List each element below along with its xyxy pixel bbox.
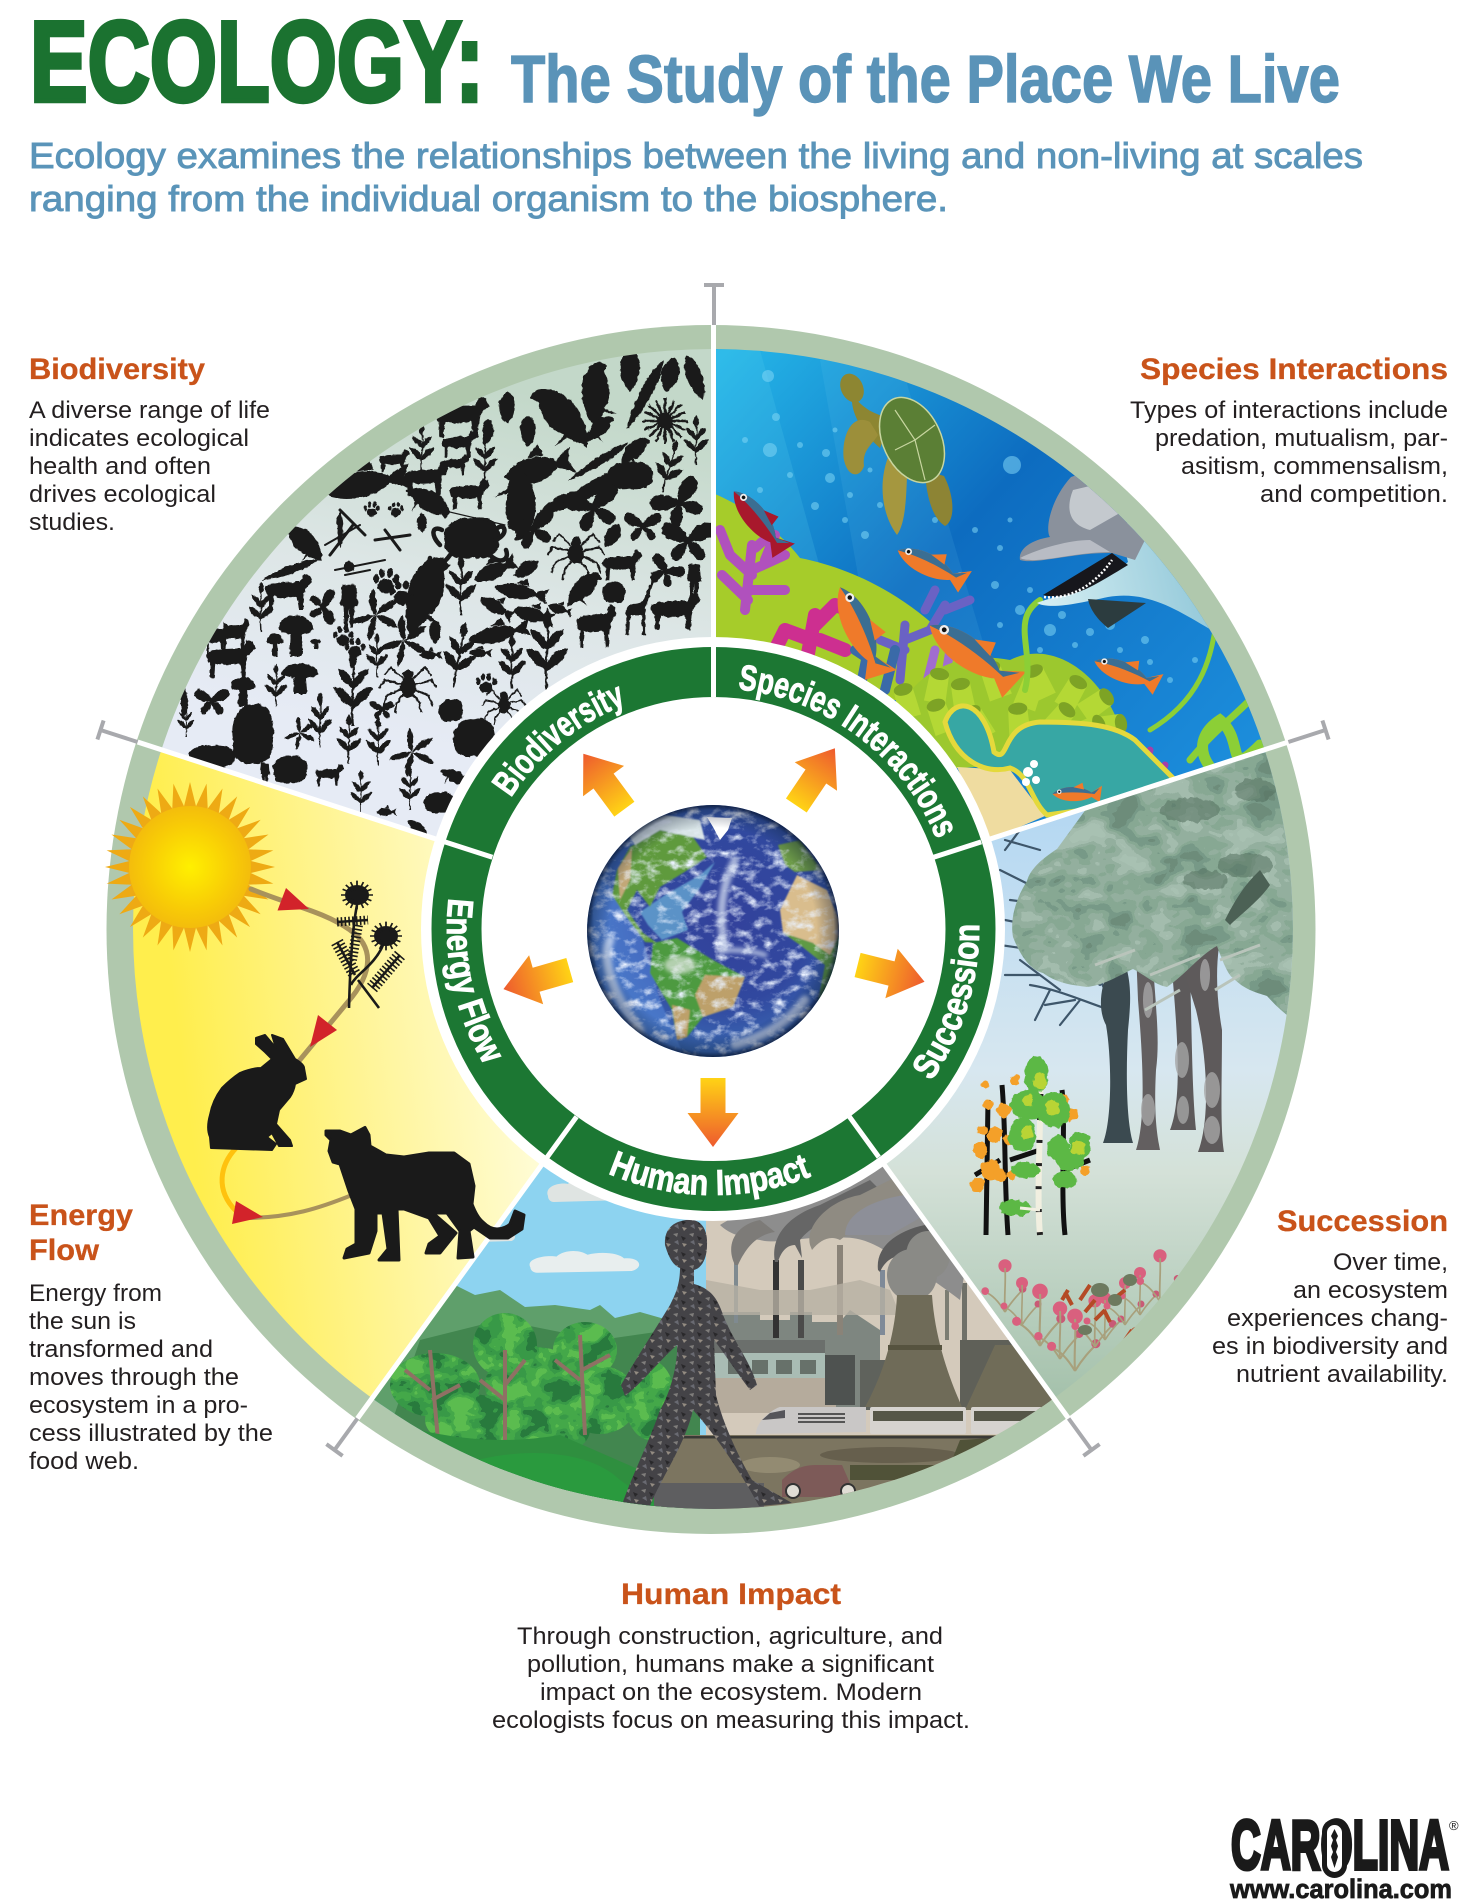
text block: energy flow [29, 1199, 273, 1475]
text block: succession: an ecosystem [1293, 1277, 1448, 1304]
kelp [1025, 600, 1260, 790]
text block: energy flow: Flow [29, 1234, 100, 1267]
text block: human impact: Human Impact [621, 1578, 841, 1611]
text block: species interactions: predation, mutualism, par- [1155, 425, 1448, 452]
text block: energy flow: Energy from [29, 1280, 162, 1307]
text block: biodiversity: A diverse range of life [29, 397, 270, 424]
text block: biodiversity: drives ecological [29, 481, 216, 508]
text block: species interactions: Types of interactions include [1130, 397, 1448, 424]
outer ring [106, 325, 1316, 1534]
text block: biodiversity: indicates ecological [29, 425, 249, 452]
text block: biodiversity [29, 353, 270, 536]
text block: species interactions [1130, 353, 1448, 508]
smoke [720, 1160, 970, 1301]
ecology wheel [96, 283, 1330, 1534]
text block: energy flow: cess illustrated by the [29, 1420, 273, 1447]
text block: biodiversity: studies. [29, 509, 115, 536]
octopus and insects detail [325, 505, 507, 575]
sector dividers [138, 325, 1288, 1418]
train [756, 1407, 1064, 1434]
heading: ECOLOGY: ECOLOGY: [30, 0, 484, 126]
intro text block: Ecology examines the relationships between the living and non-living at scales [29, 135, 1363, 176]
text block: species interactions: and competition. [1260, 481, 1448, 508]
text block: human impact: ecologists focus on measuring this impact. [492, 1707, 970, 1734]
text block: human impact: impact on the ecosystem. Modern [540, 1679, 922, 1706]
panel: energy flow food web [103, 780, 524, 1260]
green hill [716, 494, 955, 700]
text block: succession: es in biodiversity and [1212, 1333, 1448, 1360]
ring label: Human Impact: Human Impact [609, 1150, 812, 1200]
subtitle: The Study of the Place We Live [511, 42, 1340, 117]
cooling towers [865, 1295, 962, 1407]
hills and forest [374, 1286, 662, 1506]
text block: succession: nutrient availability. [1236, 1361, 1448, 1388]
title [30, 0, 1340, 126]
icon: earth globe [587, 805, 839, 1070]
rabbit [208, 1035, 306, 1150]
arrow to human impact [688, 1078, 738, 1147]
industrial buildings [706, 1245, 1050, 1413]
sponge tubes [894, 661, 1128, 736]
ground [661, 1435, 996, 1509]
text block: species interactions: asitism, commensalism, [1181, 453, 1448, 480]
thistle [337, 881, 402, 1008]
food web links [222, 889, 368, 1218]
text block: energy flow: transformed and [29, 1336, 213, 1363]
panel: energy flow background [133, 752, 540, 1397]
sand [957, 767, 1045, 840]
walking person [621, 1220, 792, 1506]
panel: human impact image [360, 1160, 1075, 1515]
green label ring [456, 672, 970, 1186]
ring label: Species Interactions: Species Interactions [739, 664, 953, 838]
red arrowheads [232, 888, 337, 1224]
text block: succession [1212, 1205, 1448, 1388]
text block: succession: Succession [1277, 1205, 1448, 1238]
logo: Carolina: ® [1449, 1818, 1459, 1833]
sea turtle [836, 370, 957, 535]
text block: species interactions: Species Interactions [1140, 353, 1448, 386]
canopy [1012, 752, 1293, 1014]
panel: biodiversity silhouettes [150, 340, 720, 850]
reef base [913, 654, 1115, 768]
text block: succession: experiences chang- [1227, 1305, 1448, 1332]
fish [734, 491, 795, 558]
wildflowers [981, 1249, 1181, 1371]
text block: biodiversity: health and often [29, 453, 211, 480]
text block: succession: Over time, [1333, 1249, 1448, 1276]
arrow to species interactions [775, 734, 856, 820]
bare branches [999, 832, 1104, 1026]
clouds [547, 1183, 606, 1202]
text block: energy flow: Energy [29, 1199, 133, 1232]
text block: energy flow: food web. [29, 1448, 139, 1475]
panel: species interactions reef image [716, 349, 1264, 836]
text block: human impact [492, 1578, 970, 1734]
teal mound [945, 706, 1180, 815]
text block: energy flow: moves through the [29, 1364, 239, 1391]
text block: energy flow: the sun is [29, 1308, 136, 1335]
dolphin [1020, 476, 1209, 628]
icon: logo capsule with insect [1322, 1819, 1347, 1878]
ring label: Biodiversity: Biodiversity [491, 686, 622, 797]
young trees [970, 1056, 1091, 1235]
text block: energy flow: ecosystem in a pro- [29, 1392, 248, 1419]
ring label: Succession: Succession [913, 925, 980, 1078]
text block: human impact: pollution, humans make a significant [527, 1651, 934, 1678]
tick marks [97, 285, 1329, 1456]
intro text block: ranging from the individual organism to the biosphere. [29, 178, 948, 219]
central hub [421, 637, 1005, 1221]
bubbles [742, 370, 1198, 683]
cougar [326, 1128, 524, 1260]
coral [720, 530, 1165, 800]
panel: succession forest image [886, 752, 1293, 1396]
text block: human impact: Through construction, agriculture, and [517, 1623, 943, 1650]
car [782, 1465, 856, 1498]
arrow to energy flow [496, 946, 577, 1014]
text block: biodiversity: Biodiversity [29, 353, 205, 386]
ring label: Energy Flow: Energy Flow [442, 899, 502, 1062]
mature trees [1100, 946, 1224, 1152]
sun icon [103, 780, 277, 954]
arrow to succession [851, 940, 931, 1006]
intro text block [29, 135, 1363, 219]
arrow to biodiversity [563, 739, 645, 824]
